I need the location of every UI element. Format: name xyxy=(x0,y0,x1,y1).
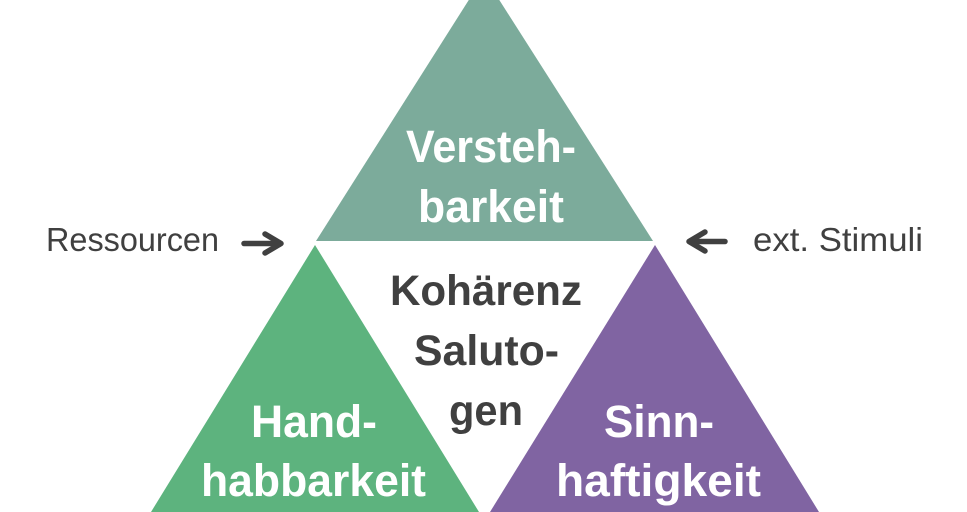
panel: Handhabbarkeit triangle: habbarkeit xyxy=(201,455,426,506)
center label: Kohärenz Salutogen xyxy=(390,267,582,435)
panel: Sinnhaftigkeit triangle: haftigkeit xyxy=(556,455,761,506)
panel: Sinnhaftigkeit triangle: Sinn- xyxy=(604,396,714,447)
center label: Kohärenz Salutogen: Saluto- xyxy=(414,327,559,375)
label: Ressourcen: Ressourcen xyxy=(46,221,219,258)
panel: Verstehbarkeit triangle: Versteh- xyxy=(406,121,576,172)
label: ext. Stimuli: ext. Stimuli xyxy=(753,221,923,258)
panel: Verstehbarkeit triangle xyxy=(316,0,653,241)
arrow: Ressourcen pointing right xyxy=(244,234,281,253)
center label: Kohärenz Salutogen: Kohärenz xyxy=(390,267,582,315)
panel: Handhabbarkeit triangle xyxy=(151,245,479,512)
panel: Handhabbarkeit triangle: Hand- xyxy=(251,396,377,447)
panel: Sinnhaftigkeit triangle xyxy=(490,245,819,512)
panel: Verstehbarkeit triangle: barkeit xyxy=(418,181,564,232)
arrow: ext. Stimuli pointing left xyxy=(689,232,725,251)
center label: Kohärenz Salutogen: gen xyxy=(449,387,523,435)
